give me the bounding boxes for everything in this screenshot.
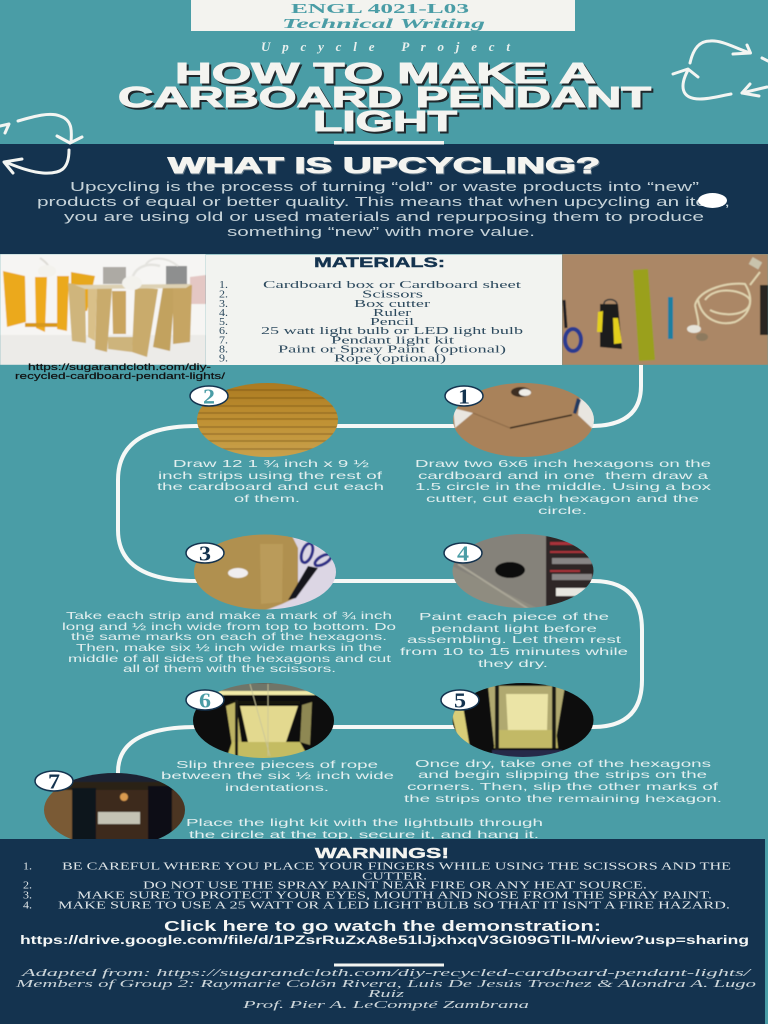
step 2 <box>157 380 384 505</box>
step 5 text <box>404 758 722 805</box>
badge 7: 7 <box>48 770 60 794</box>
step 6 <box>161 680 394 794</box>
step 7 text: the circle at the top, secure it, and hang it. <box>189 829 539 841</box>
step 1 <box>415 380 712 517</box>
warnings list: MAKE SURE TO USE A 25 WATT OR A LED LIGHT BULB SO THAT IT ISN'T A FIRE HAZARD. <box>58 900 730 912</box>
materials list: 1. <box>219 280 228 291</box>
step 1 text: cardboard and in one them draw a <box>418 470 708 482</box>
materials list: 7. <box>219 336 228 346</box>
cord <box>695 272 760 328</box>
photo: lamp with ropes <box>193 683 334 758</box>
step 3 text <box>62 610 396 675</box>
step 4 text: assembling. Let them rest <box>407 634 621 646</box>
subtitle: U p c y c l e P r o j e c t <box>261 39 510 54</box>
step 2 text <box>157 458 384 505</box>
badge 2 <box>190 384 228 408</box>
step 3 text: Take each strip and make a mark of ¾ inch <box>66 610 392 622</box>
photo: hanging lamp <box>44 773 185 839</box>
step 2 text: of them. <box>234 493 300 505</box>
photo: marked cardboard and scissors <box>194 534 336 610</box>
credits: Ruiz <box>366 988 405 1000</box>
step 2 text: inch strips using the rest of <box>158 470 382 482</box>
photo: cardboard strips <box>197 383 338 457</box>
step 1 text: 1.5 circle in the middle. Using a box <box>415 481 712 493</box>
warnings list: 2. <box>23 880 32 892</box>
course label <box>191 0 575 31</box>
badge 3: 3 <box>199 542 211 566</box>
step 5 text: the strips onto the remaining hexagon. <box>404 793 722 805</box>
materials list: 25 watt light bulb or LED light bulb <box>261 326 523 337</box>
step 3 text: Then, make six ½ inch wide marks in the <box>76 642 382 654</box>
heading: materials: MATERIALS: <box>314 254 445 270</box>
step 7 <box>35 770 543 842</box>
step 5 text: and begin slipping the strips on the <box>418 769 707 781</box>
materials list: 6. <box>219 326 228 337</box>
heading: what is upcycling: WHAT IS UPCYCLING? <box>168 153 600 178</box>
step 5 <box>404 680 722 805</box>
badge 3 <box>186 542 224 566</box>
badge 5: 5 <box>454 688 466 712</box>
step 6 text: between the six ½ inch wide <box>161 770 394 782</box>
icon: recycle arrows left <box>0 114 82 173</box>
credits: Prof. Pier A. LeCompté Zambrana <box>241 999 530 1011</box>
materials list: 5. <box>219 317 228 328</box>
upcycling definition: you are using old or used materials and repurposing them to produce <box>64 209 704 224</box>
course label: ENGL 4021-L03 <box>291 1 469 16</box>
badge 4 <box>444 542 482 566</box>
panel: what is upcycling <box>0 144 768 254</box>
title: CARBOARD PENDANT <box>118 82 651 114</box>
upcycling definition <box>37 179 730 239</box>
step 5 text: Once dry, take one of the hexagons <box>415 758 711 770</box>
step 3 text: middle of all sides of the hexagons and cut <box>68 653 391 665</box>
badge 7 <box>35 770 73 794</box>
materials list <box>219 280 523 364</box>
image source caption: recycled-cardboard-pendant-lights/ <box>15 371 225 382</box>
badge 5 <box>441 688 479 712</box>
icon: recycle arrows right <box>673 41 768 99</box>
badge 4: 4 <box>457 542 470 566</box>
panel: materials <box>206 254 562 365</box>
step 5 text: corners. Then, slip the other marks of <box>407 781 718 793</box>
materials list: 9. <box>219 354 228 364</box>
badge 2: 2 <box>203 384 215 408</box>
materials list: Pendant light kit <box>331 336 454 346</box>
title: LIGHT <box>313 106 457 138</box>
materials list: Cardboard box or Cardboard sheet <box>263 280 521 291</box>
materials list: Scissors <box>362 290 423 300</box>
step 6 text <box>161 759 394 794</box>
demonstration link: https://drive.google.com/file/d/1PZsrRuZxA8e51lJjxhxqV3GI09GTlI-M/view?usp=sharing <box>20 935 749 947</box>
upcycling definition: something “new” with more value. <box>227 224 535 239</box>
title: HOW TO MAKE A <box>175 58 596 90</box>
demonstration link <box>20 919 749 947</box>
step 1 text: circle. <box>538 505 587 517</box>
warnings list: 3. <box>23 890 32 902</box>
materials list: Ruler <box>373 308 412 319</box>
credits divider <box>334 964 444 966</box>
photo: painted hexagon and spray can <box>452 534 594 608</box>
materials list: Pencil <box>370 317 414 328</box>
step 3 text: all of them with the scissors. <box>123 663 336 675</box>
demonstration link: Click here to go watch the demonstration: <box>164 919 601 935</box>
warnings list: 4. <box>23 900 32 912</box>
materials list: Rope (optional) <box>334 354 447 364</box>
title divider <box>334 141 444 144</box>
white blot <box>698 193 727 208</box>
title <box>118 58 651 138</box>
box cutter <box>600 304 622 349</box>
step 7 text: Place the light kit with the lightbulb through <box>186 817 543 829</box>
credits <box>14 967 757 1011</box>
upcycling definition: products of equal or better quality. This means that when upcycling an item, <box>37 194 730 209</box>
badge 1 <box>445 384 483 408</box>
process path <box>118 365 642 790</box>
materials list: 4. <box>219 308 228 319</box>
pencil <box>668 297 673 339</box>
step 4 text <box>400 611 628 670</box>
badge 6 <box>186 688 224 712</box>
materials list: Paint or Spray Paint (optional) <box>278 344 507 356</box>
step 4 text: from 10 to 15 minutes while <box>400 646 628 658</box>
image source caption <box>15 362 225 382</box>
step 3 text: long and ½ inch wide from top to bottom. Do <box>62 621 396 633</box>
scissors <box>564 300 566 328</box>
photo: assembled lamp frame <box>452 683 594 757</box>
warnings list: DO NOT USE THE SPRAY PAINT NEAR FIRE OR ANY HEAT SOURCE. <box>143 880 647 892</box>
step 1 text <box>415 458 712 517</box>
step 3 text: the same marks on each of the hexagons. <box>71 631 387 643</box>
step 7 text <box>186 817 543 841</box>
warnings list: CUTTER. <box>362 872 427 882</box>
materials list: 2. <box>219 290 228 300</box>
materials list: 3. <box>219 299 228 310</box>
photo: materials laid out <box>562 254 768 365</box>
upcycling definition: Upcycling is the process of turning “old” or waste products into “new” <box>70 179 699 194</box>
step 1 text: Draw two 6x6 inch hexagons on the <box>415 458 711 470</box>
heading: warnings: WARNINGS! <box>315 846 449 862</box>
step 2 text: the cardboard and cut each <box>157 481 384 493</box>
step 1 text: cutter, cut each hexagon and the <box>426 493 699 505</box>
course label: Technical Writing <box>282 16 485 31</box>
warnings list: MAKE SURE TO PROTECT YOUR EYES, MOUTH AND NOSE FROM THE SPRAY PAINT. <box>77 890 712 902</box>
materials list: 8. <box>219 344 228 356</box>
step 4 <box>400 532 628 670</box>
warnings list <box>23 862 731 912</box>
photo: finished cardboard lamps <box>0 254 206 365</box>
warnings list: BE CAREFUL WHERE YOU PLACE YOUR FINGERS WHILE USING THE SCISSORS AND THE <box>62 862 731 872</box>
step 2 text: Draw 12 1 ¾ inch x 9 ½ <box>173 458 369 470</box>
step 4 text: Paint each piece of the <box>419 611 609 623</box>
step 4 text: pendant light before <box>431 623 597 635</box>
step 6 text: indentations. <box>225 782 329 794</box>
credits: Members of Group 2: Raymarie Colón Rivera, Luis De Jesús Trochez & Alondra A. Lugo <box>14 978 757 990</box>
badge 1: 1 <box>458 384 470 408</box>
step 3 <box>62 532 396 675</box>
badge 6: 6 <box>199 688 211 712</box>
step 4 text: they dry. <box>478 658 548 670</box>
step 6 text: Slip three pieces of rope <box>176 759 378 771</box>
photo: cardboard hexagon <box>453 383 594 457</box>
panel: warnings and credits <box>0 839 765 1024</box>
image source caption: https://sugarandcloth.com/diy- <box>28 362 211 373</box>
materials list: Box cutter <box>354 299 431 310</box>
ruler <box>633 269 655 361</box>
warnings list: 1. <box>23 862 32 872</box>
credits: Adapted from: https://sugarandcloth.com/diy-recycled-cardboard-pendant-lights/ <box>20 967 752 979</box>
